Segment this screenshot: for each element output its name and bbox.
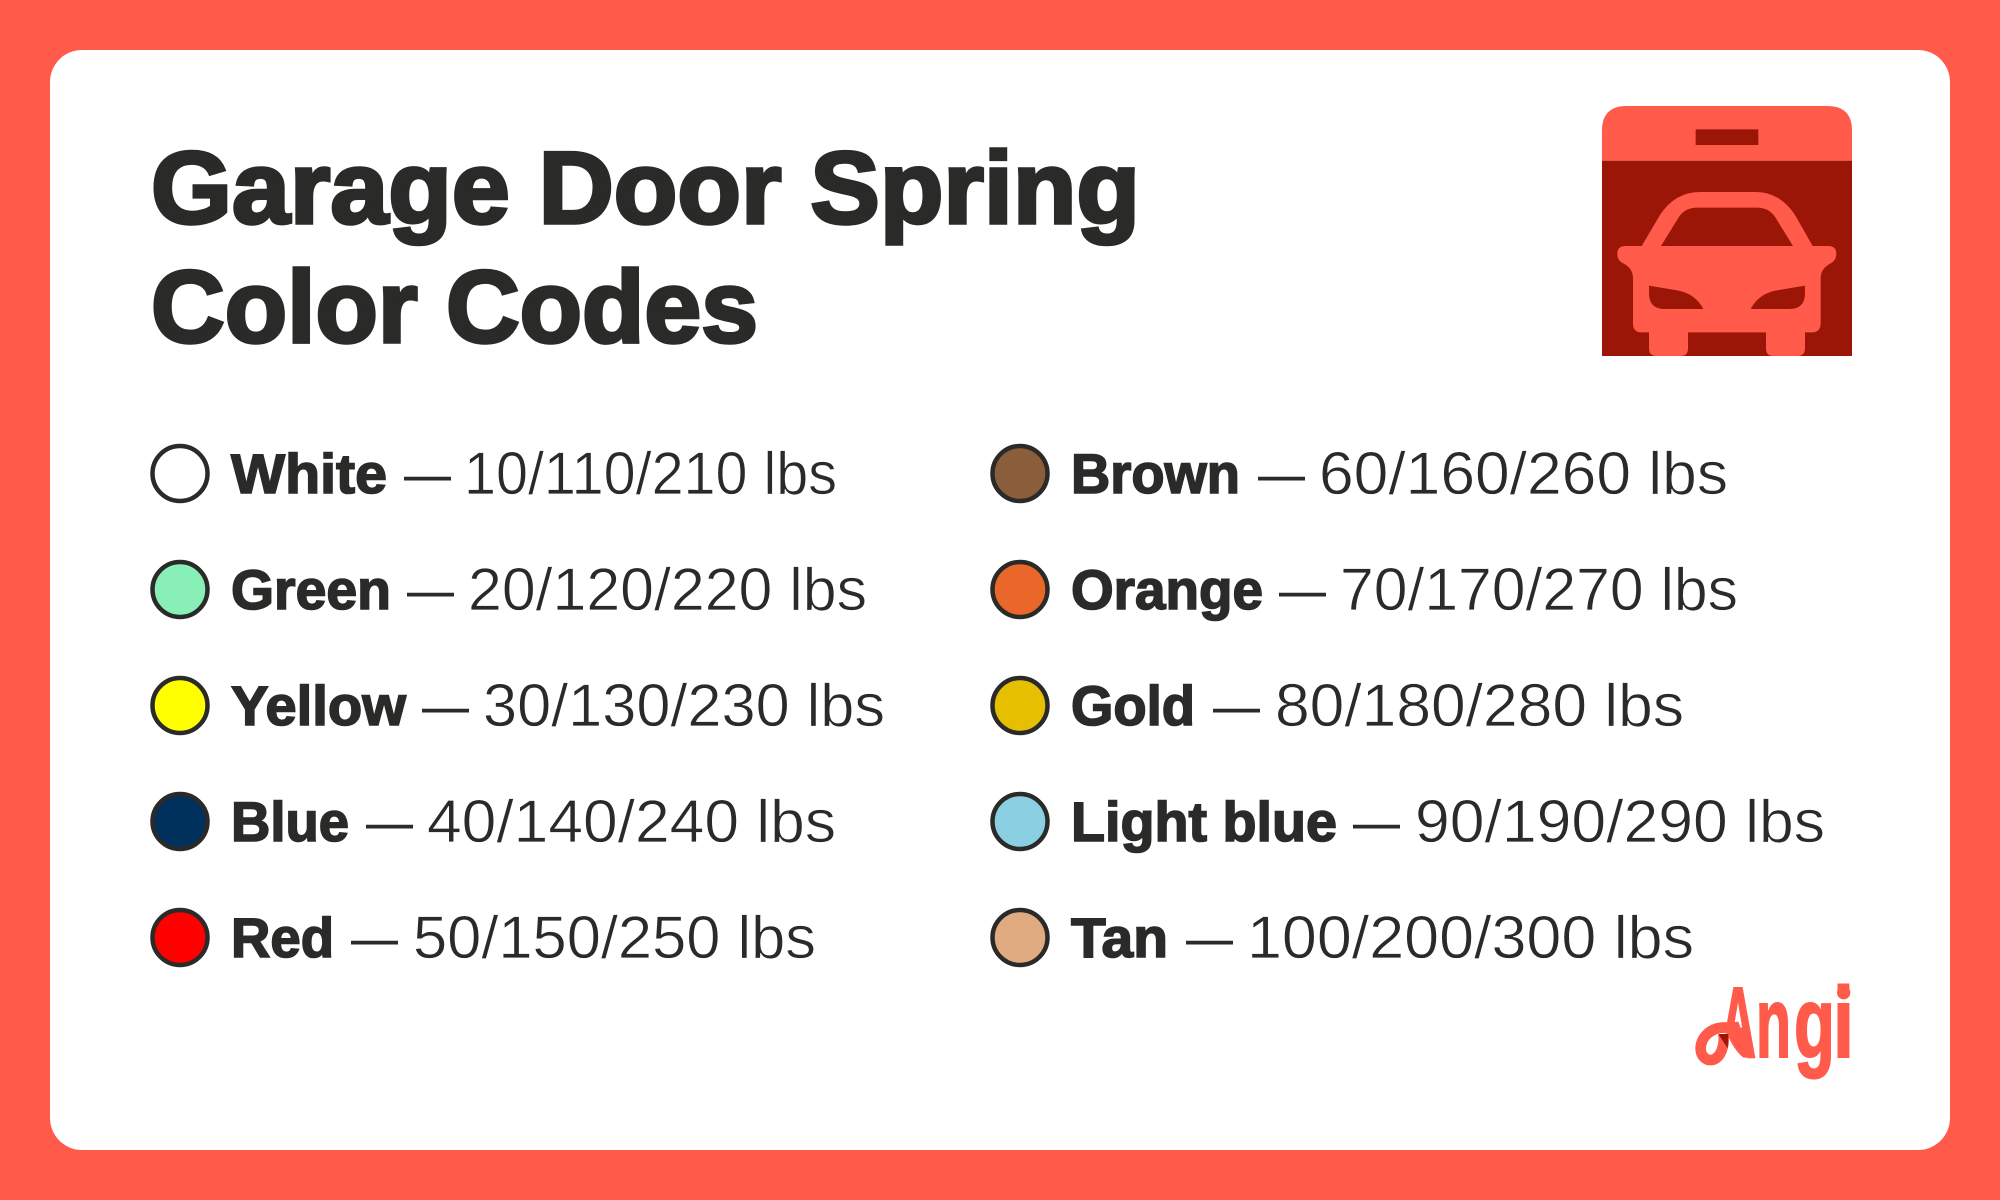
logo: Angi: g	[1794, 967, 1835, 1079]
spring: Tan: 100/200/300 lbs	[1247, 904, 1694, 971]
spring: Blue	[152, 788, 836, 855]
spring: Tan: —	[1186, 906, 1233, 970]
spring: Brown: —	[1258, 442, 1305, 506]
title: Color Codes	[151, 250, 758, 364]
spring: Blue: Blue	[231, 790, 349, 853]
spring: White: 10/110/210 lbs	[464, 440, 837, 507]
spring: Red: —	[351, 906, 398, 970]
spring: Light blue	[992, 788, 1825, 855]
spring: Light blue: —	[1353, 790, 1400, 854]
spring: Yellow: —	[422, 674, 469, 738]
spring: Light blue: 90/190/290 lbs	[1415, 788, 1825, 855]
spring: Green: —	[407, 558, 454, 622]
spring: Brown	[992, 440, 1728, 507]
spring: Orange: Orange	[1071, 558, 1263, 621]
spring: Light blue: Light blue	[1071, 790, 1337, 853]
spring: Blue: —	[366, 790, 413, 854]
title: Garage Door Spring	[151, 131, 1140, 245]
logo: Angi: n	[1756, 967, 1791, 1079]
spring: White: White	[231, 442, 387, 505]
logo: Angi: i	[1833, 967, 1854, 1079]
spring: Yellow	[152, 672, 885, 739]
logo: Angi	[1701, 967, 1854, 1079]
spring: White	[152, 440, 837, 507]
spring: Yellow: 30/130/230 lbs	[483, 672, 885, 739]
spring: Tan	[992, 904, 1694, 971]
spring: Tan: Tan	[1071, 906, 1168, 969]
spring: Green	[152, 556, 867, 623]
spring: Red	[152, 904, 816, 971]
spring: Gold: —	[1213, 674, 1260, 738]
spring: Red: Red	[231, 906, 334, 969]
spring: Red: 50/150/250 lbs	[413, 904, 816, 971]
logo: Angi: A	[1720, 967, 1756, 1079]
spring: Yellow: Yellow	[231, 674, 406, 737]
spring: Brown: Brown	[1071, 442, 1240, 505]
spring: Gold	[992, 672, 1684, 739]
spring: Green: 20/120/220 lbs	[468, 556, 867, 623]
title	[151, 131, 1140, 364]
spring: Gold: Gold	[1071, 674, 1195, 737]
spring: White: —	[404, 442, 451, 506]
spring: Orange: 70/170/270 lbs	[1340, 556, 1738, 623]
icon: car in garage	[1602, 106, 1852, 356]
spring: Green: Green	[231, 558, 391, 621]
spring: Brown: 60/160/260 lbs	[1319, 440, 1728, 507]
spring: Orange: —	[1279, 558, 1326, 622]
spring: Gold: 80/180/280 lbs	[1275, 672, 1684, 739]
spring: Orange	[992, 556, 1738, 623]
spring: Blue: 40/140/240 lbs	[427, 788, 836, 855]
